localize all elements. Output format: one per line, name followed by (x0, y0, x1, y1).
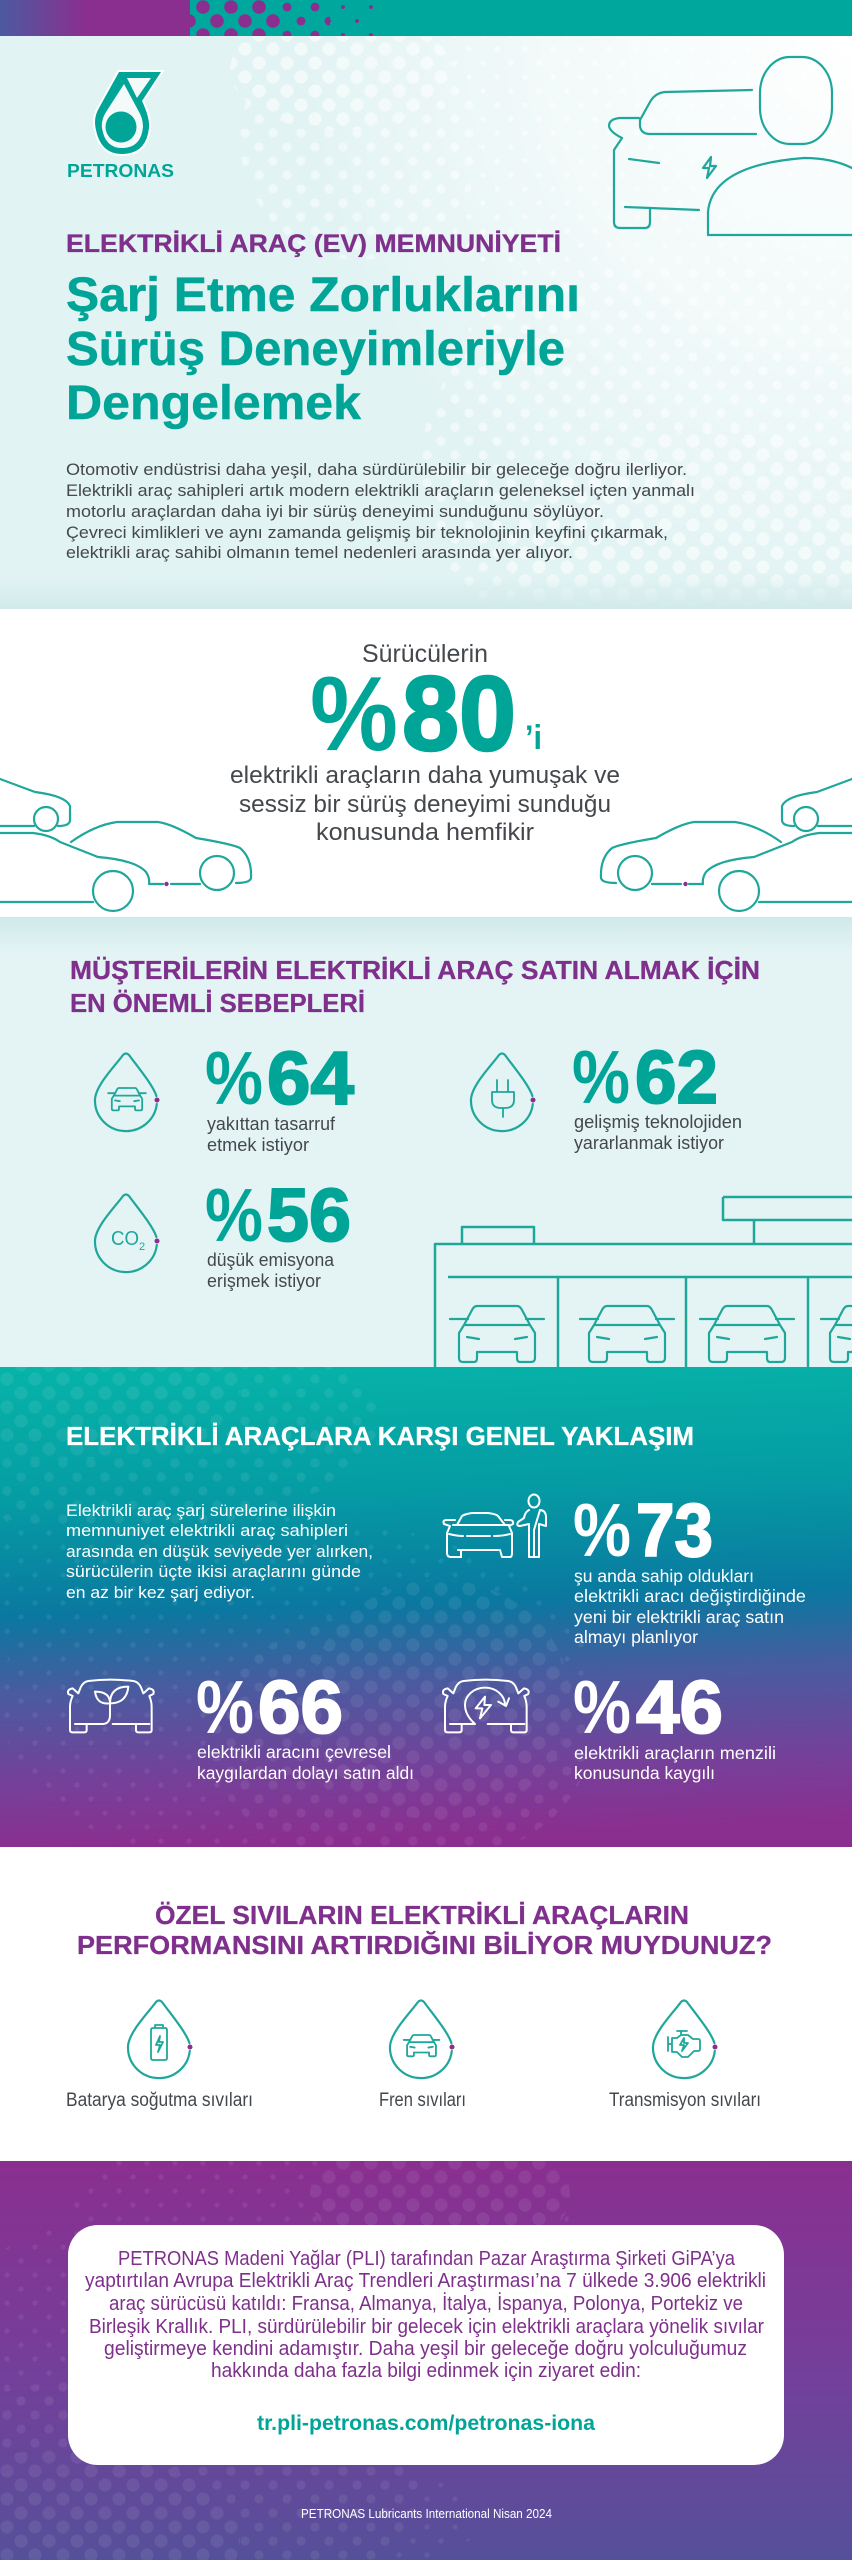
subtitle: ELEKTRİKLİ ARAÇ (EV) MEMNUNİYETİ (66, 230, 561, 258)
stat: 73 percent (573, 1488, 806, 1647)
illustration: cars right (601, 779, 852, 911)
icon: car with charging loop (443, 1680, 529, 1732)
title: Dengelemek (66, 377, 361, 430)
intro paragraph: Elektrikli araç sahipleri artık modern elektrikli araçların geleneksel içten yanmalı (66, 481, 695, 500)
icon: car with plant (68, 1680, 154, 1732)
text: charging satisfaction: memnuniyet elektrikli araç sahipleri (66, 1521, 348, 1540)
heading: fluids (77, 1900, 772, 1960)
intro paragraph: motorlu araçlardan daha iyi bir sürüş deneyimi sunduğunu söylüyor. (66, 502, 604, 521)
heading: reasons (70, 955, 760, 1018)
stat: 80 percent: % (310, 655, 398, 773)
text: study description: PETRONAS Madeni Yağlar (PLI) tarafından Pazar Araştırma Şirketi GiPA’ya (118, 2248, 736, 2270)
text: charging satisfaction: sürücülerin üçte ikisi araçlarını günde (66, 1562, 361, 1581)
panel: general attitude (0, 1367, 852, 1847)
stat: 56 percent: düşük emisyona (207, 1249, 335, 1270)
stat: 80 percent: 80 (402, 655, 516, 773)
stat: 64 percent: yakıttan tasarruf (207, 1113, 336, 1134)
stat: 56 percent: 56 (267, 1173, 351, 1257)
text: agreement: sessiz bir sürüş deneyimi sunduğu (239, 791, 611, 818)
icon: engine drop (653, 2000, 718, 2078)
heading: reasons: EN ÖNEMLİ SEBEPLERİ (70, 988, 365, 1018)
stat: 56 percent: % (205, 1173, 263, 1257)
label: battery coolants: Batarya soğutma sıvıları (66, 2090, 253, 2111)
stat: 56 percent (205, 1173, 351, 1291)
text: charging satisfaction: Elektrikli araç şarj sürelerine ilişkin (66, 1501, 336, 1520)
illustration: charging station (435, 1197, 852, 1367)
text: charging satisfaction (66, 1501, 373, 1602)
illustration: cars left (0, 779, 251, 911)
heading: reasons: MÜŞTERİLERİN ELEKTRİKLİ ARAÇ SATIN ALMAK İÇİN (70, 955, 760, 985)
footer credit: PETRONAS Lubricants International Nisan 2024 (301, 2506, 552, 2521)
stat: 73 percent: elektrikli aracı değiştirdiğinde (574, 1586, 806, 1606)
stat: 46 percent: 46 (636, 1665, 723, 1749)
stat: 46 percent: elektrikli araçların menzili (574, 1743, 776, 1763)
stat: 73 percent: % (573, 1488, 631, 1572)
stat: 62 percent: gelişmiş teknolojiden (574, 1111, 742, 1132)
stat: 56 percent: erişmek istiyor (207, 1270, 321, 1291)
card: study summary (68, 2225, 784, 2465)
text: study description: Birleşik Krallık. PLI, sürdürülebilir bir gelecek için elektrikli araçlara yönelik sıvılar (89, 2316, 764, 2338)
panel: footer (0, 2120, 852, 2560)
text: charging satisfaction: en az bir kez şarj ediyor. (66, 1583, 255, 1602)
stat: 64 percent: % (205, 1036, 263, 1120)
text: study description: hakkında daha fazla bilgi edinmek için ziyaret edin: (211, 2360, 641, 2382)
text: study description: araç sürücüsü katıldı: Fransa, Almanya, İtalya, İspanya, Polonya, Portekiz ve (109, 2292, 743, 2315)
intro paragraph: Otomotiv endüstrisi daha yeşil, daha sürdürülebilir bir geleceğe doğru ilerliyor. (66, 460, 687, 479)
panel: 80 percent (0, 609, 852, 917)
text: study description: geliştirmeye kendini adamıştır. Daha yeşil bir geleceğe doğru yolculuğumuz (104, 2338, 747, 2360)
panel: special fluids (0, 1847, 852, 2161)
stat: 73 percent: 73 (636, 1488, 713, 1572)
link: website: tr.pli-petronas.com/petronas-iona (257, 2412, 595, 2435)
stat: 73 percent: yeni bir elektrikli araç satın (574, 1607, 784, 1627)
heading: fluids: ÖZEL SIVILARIN ELEKTRİKLİ ARAÇLARIN (155, 1900, 689, 1930)
stat: 66 percent: 66 (258, 1665, 343, 1749)
stat: 73 percent: almayı planlıyor (574, 1627, 698, 1647)
title: Sürüş Deneyimleriyle (66, 323, 565, 376)
stat: 64 percent (205, 1036, 354, 1155)
panel: intro (0, 36, 852, 609)
illustration: car and driver (609, 57, 852, 235)
title (66, 269, 580, 430)
stat: 62 percent: % (572, 1035, 630, 1119)
intro paragraph (66, 460, 695, 562)
stat: 62 percent: 62 (635, 1035, 718, 1119)
top colour bar (0, 0, 852, 36)
heading: fluids: PERFORMANSINI ARTIRDIĞINI BİLİYOR MUYDUNUZ? (77, 1930, 772, 1960)
label: brake fluids: Fren sıvıları (379, 2090, 466, 2111)
icon: car and person (443, 1494, 546, 1557)
text: study description: yaptırtılan Avrupa Elektrikli Araç Trendleri Araştırması’na 7 ülkede 3.906 elektrikli (85, 2270, 766, 2292)
stat: 66 percent: kaygılardan dolayı satın aldı (197, 1763, 414, 1783)
text: agreement: elektrikli araçların daha yumuşak ve (230, 762, 620, 789)
stat: 64 percent: 64 (267, 1036, 354, 1120)
panel: purchase reasons (0, 917, 852, 1367)
stat: 46 percent: % (573, 1665, 631, 1749)
stat: 46 percent: konusunda kaygılı (574, 1763, 715, 1783)
icon: drop with plug (471, 1054, 536, 1131)
title: Şarj Etme Zorluklarını (66, 269, 580, 322)
stat: 66 percent: elektrikli aracını çevresel (197, 1742, 391, 1762)
label: transmission fluids: Transmisyon sıvıları (609, 2090, 761, 2111)
stat: 64 percent: etmek istiyor (207, 1134, 309, 1155)
icon: battery drop (128, 2000, 192, 2078)
text: agreement (230, 762, 620, 846)
icon: drop with car (95, 1054, 160, 1131)
intro paragraph: elektrikli araç sahibi olmanın temel nedenleri arasında yer alıyor. (66, 543, 573, 562)
intro paragraph: Çevreci kimlikleri ve aynı zamanda gelişmiş bir teknolojinin keyfini çıkarmak, (66, 523, 668, 542)
stat: 80 percent (310, 655, 542, 773)
logo: PETRONAS (67, 72, 174, 181)
stat: 62 percent (572, 1035, 742, 1153)
stat: 46 percent (573, 1665, 776, 1783)
stat: 73 percent: şu anda sahip oldukları (574, 1566, 754, 1586)
stat: 80 percent: ’i (525, 719, 542, 757)
icon: drop with CO2 (95, 1194, 160, 1272)
text: agreement: konusunda hemfikir (316, 819, 534, 846)
icon: drop with CO2: CO (111, 1228, 139, 1250)
icon: drop with CO2: 2 (139, 1241, 145, 1253)
stat: 66 percent (196, 1665, 414, 1783)
text: study description (85, 2248, 766, 2382)
logo: PETRONAS: PETRONAS (67, 161, 174, 181)
heading: attitude: ELEKTRİKLİ ARAÇLARA KARŞI GENEL YAKLAŞIM (66, 1421, 694, 1451)
stat: 66 percent: % (196, 1665, 254, 1749)
text: drivers: Sürücülerin (362, 640, 488, 668)
icon: brake drop (390, 2000, 454, 2078)
text: charging satisfaction: arasında en düşük seviyede yer alırken, (66, 1542, 373, 1561)
stat: 62 percent: yararlanmak istiyor (574, 1132, 724, 1153)
